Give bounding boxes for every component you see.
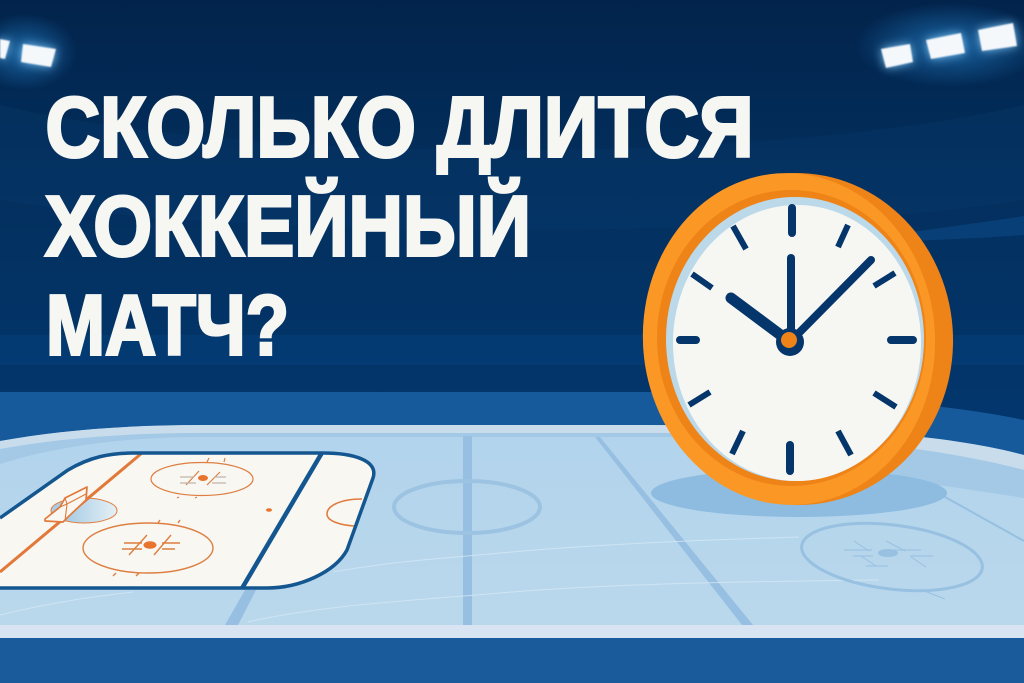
- blue line right: [595, 437, 753, 625]
- title: [45, 80, 754, 374]
- title: МАТЧ?: [46, 278, 289, 374]
- center ice circle: [394, 481, 540, 533]
- crease: [51, 498, 117, 523]
- faded faceoff circle: [798, 514, 986, 600]
- blue line left: [225, 590, 256, 625]
- ice scratches: [0, 537, 879, 622]
- title: СКОЛЬКО ДЛИТСЯ: [46, 80, 754, 176]
- clock hands: [731, 258, 871, 342]
- far line right: [945, 497, 1024, 541]
- rink surround band: [0, 392, 1024, 683]
- rink surface: [0, 425, 1024, 625]
- hour ticks: [680, 208, 913, 471]
- clock rim front: [632, 163, 946, 515]
- blue line: [241, 451, 323, 590]
- faceoff circle bottom: [83, 520, 213, 576]
- clock: [632, 163, 964, 515]
- center red line (faded): [463, 436, 472, 625]
- clock hub: [776, 328, 804, 356]
- neutral spot: [266, 508, 272, 512]
- mini rink diagram: [0, 451, 374, 590]
- arc: [327, 499, 362, 526]
- stadium lights: left: [0, 14, 77, 90]
- inner rim: [657, 190, 926, 486]
- mini rink outline: [0, 453, 374, 588]
- clock shadow: [651, 469, 947, 517]
- stadium lights: right: [855, 3, 1024, 87]
- clock rim back: [632, 163, 964, 515]
- bottom band: [0, 638, 1024, 683]
- clock face edge: [666, 197, 924, 481]
- clock face: [673, 205, 921, 481]
- title: ХОККЕЙНЫЙ: [45, 178, 531, 274]
- goal line: [0, 453, 142, 572]
- board bottom: [0, 625, 1024, 638]
- faceoff circle top: [151, 458, 253, 498]
- goal net: [45, 487, 87, 522]
